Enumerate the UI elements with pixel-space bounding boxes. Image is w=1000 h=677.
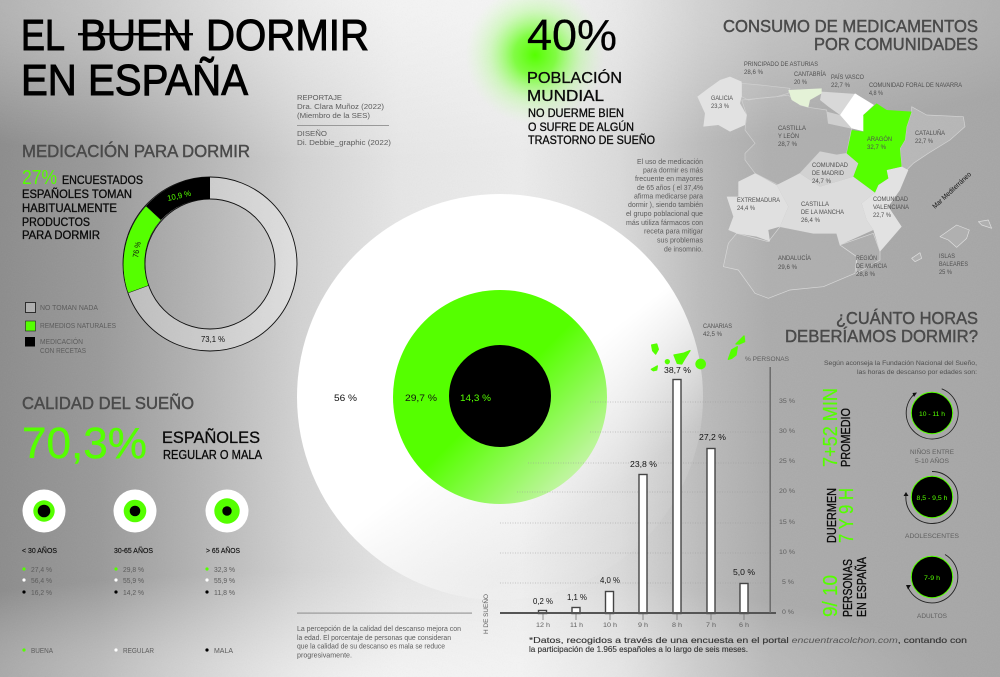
vertical stat: personas: 9/ 10 — [820, 575, 842, 617]
clock: adolescentes — [904, 472, 959, 540]
region: Extremadura — [727, 173, 788, 242]
map labels: CASTILLA — [801, 201, 830, 208]
age group: mayores de 65: 11,8 % — [214, 590, 235, 597]
black pupil: mala 14,3 % — [449, 345, 551, 447]
bar value labels — [533, 366, 755, 606]
green ring: buena 29,7 % — [393, 290, 607, 504]
quality legend: REGULAR — [123, 648, 154, 655]
medication paragraph: El uso de medicación — [637, 159, 703, 166]
bar chart: horas de sueño — [481, 356, 795, 634]
map labels — [711, 61, 973, 278]
stat caption — [162, 428, 263, 462]
title: EL — [21, 11, 65, 60]
segment: medicación con recetas — [146, 177, 210, 220]
bar 11 h — [572, 608, 580, 614]
bar value labels: 27,2 % — [699, 433, 726, 442]
quality legend: MALA — [214, 648, 233, 655]
map labels: DE MURCIA — [856, 263, 888, 270]
age group: 30-65: 14,2 % — [123, 590, 144, 597]
vertical stat: promedio: PROMEDIO — [838, 408, 853, 467]
map labels: ARAGÓN — [867, 134, 892, 143]
map labels: 29,6 % — [778, 264, 797, 271]
region: Valencia — [862, 167, 908, 252]
eye: menores de 30 — [22, 490, 66, 532]
region: Castilla-La Mancha — [777, 173, 875, 245]
region: Baleares — [912, 220, 992, 262]
medication paragraph: frecuente en mayores — [635, 176, 704, 183]
donut chart — [123, 177, 297, 351]
x axis labels: 7 h — [706, 622, 716, 629]
map labels: COMUNIDAD — [873, 196, 908, 203]
map labels: 28,7 % — [778, 141, 797, 148]
credits: Dra. Clara Muñoz (2022) — [297, 104, 384, 111]
map labels: CANTABRÍA — [794, 69, 827, 78]
medication paragraph: receta para mitigar — [644, 228, 704, 236]
map labels: PAÍS VASCO — [831, 72, 864, 81]
age group: 30-65: 55,9 % — [123, 578, 144, 585]
heading — [785, 308, 978, 346]
40% headline stat: TRASTORNO DE SUEÑO — [528, 134, 655, 147]
bar value labels: 23,8 % — [630, 460, 657, 469]
40% headline stat — [527, 11, 655, 147]
40% headline stat: POBLACIÓN — [527, 70, 622, 87]
vertical stat: promedio — [820, 388, 853, 467]
region: Aragón — [847, 103, 912, 193]
x axis labels: 11 h — [570, 622, 583, 629]
70,3% stat: 70,3% — [22, 419, 147, 468]
bar 9 h — [639, 474, 647, 614]
map labels: 28,8 % — [856, 271, 875, 278]
eye: mayores de 65 — [206, 490, 248, 532]
map labels: Y LEÓN — [778, 131, 799, 140]
map labels: 28,6 % — [744, 69, 763, 76]
40% headline stat: O SUFRE DE ALGÚN — [528, 121, 634, 134]
title — [21, 11, 369, 105]
age group: 30-65 — [114, 546, 153, 597]
x axis labels: 9 h — [638, 622, 648, 629]
map labels: EXTREMADURA — [737, 197, 781, 204]
bar 7 h — [707, 448, 715, 614]
region: Madrid — [800, 152, 858, 187]
map labels: 22,7 % — [831, 82, 850, 89]
bar 8 h — [673, 380, 681, 614]
map labels: BALEARES — [939, 261, 968, 268]
Canary Islands: CANARIAS — [703, 323, 733, 330]
stat text — [22, 167, 143, 242]
map labels: ISLAS — [939, 253, 956, 260]
stat text: 27% — [22, 167, 57, 189]
map labels: 4,8 % — [869, 90, 883, 97]
green glow — [465, 0, 605, 125]
intro text: las horas de descanso por edades son: — [857, 369, 977, 376]
heading: consumo de medicamentos: POR COMUNIDADES — [814, 34, 978, 54]
vertical stat: duermen: DUERMEN — [824, 488, 839, 543]
vertical stat: promedio: 7+52 MIN — [820, 388, 842, 467]
title: BUEN — [80, 11, 192, 60]
legend — [25, 302, 116, 355]
map labels: PRINCIPADO DE ASTURIAS — [744, 61, 819, 68]
heading: DEBERÍAMOS DORMIR? — [785, 326, 978, 346]
age group: menores de 30 — [22, 546, 57, 597]
clock: adolescentes: 8,5 - 9,5 h — [916, 495, 948, 502]
region: Andalucía — [723, 227, 857, 298]
age group: menores de 30: 56,4 % — [31, 578, 52, 585]
text block: percepción de la calidad: que la calidad de su descanso es mala se reduce — [297, 644, 445, 650]
age group: mayores de 65: 32,3 % — [214, 567, 235, 574]
medication paragraph: más utiliza fármacos con — [626, 220, 703, 227]
heading: consumo de medicamentos — [723, 16, 978, 54]
map labels: 24,7 % — [812, 178, 831, 185]
eye: 30-65 — [114, 490, 156, 532]
map labels: 24,4 % — [737, 205, 755, 212]
white ring: regular 56 % — [297, 194, 703, 600]
Canary Islands — [651, 323, 745, 371]
y axis labels: 15 % — [779, 519, 795, 526]
stat text: PARA DORMIR — [22, 230, 100, 242]
stat text: HABITUALMENTE — [22, 203, 117, 215]
medication paragraph: afirma medicarse para — [634, 194, 703, 200]
region: País Vasco — [820, 92, 857, 115]
bar 12 h — [538, 610, 546, 614]
donut chart: 73,1 % — [201, 335, 225, 344]
x axis labels: 6 h — [739, 622, 749, 629]
clock: niños: NIÑOS ENTRE — [910, 447, 954, 456]
large eye chart — [297, 194, 703, 600]
quality legend — [22, 648, 233, 655]
stat text: PRODUCTOS — [22, 217, 90, 229]
intro text — [824, 360, 977, 376]
medication paragraph: para dormir es más — [643, 168, 703, 174]
footnote: *Datos, recogidos a través de una encuesta en el portal encuentracolchon.com , contando con — [529, 636, 967, 645]
age group: 30-65: 29,8 % — [123, 567, 144, 574]
map labels: 32,7 % — [867, 144, 886, 151]
stat text: ESPAÑOLES TOMAN — [22, 188, 132, 201]
donut chart: 10,9 % — [166, 189, 192, 203]
x axis labels: 10 h — [603, 622, 617, 629]
heading: consumo de medicamentos: CONSUMO DE MEDICAMENTOS — [723, 16, 978, 36]
Canary Islands: 42,5 % — [703, 331, 722, 338]
text block: percepción de la calidad: progresivamente. — [297, 652, 352, 660]
panel: cuántas horas — [785, 308, 978, 620]
map labels: GALICIA — [711, 95, 733, 102]
vertical stat: duermen: 7 Y 9 H — [836, 488, 858, 543]
y axis labels: 20 % — [779, 488, 795, 495]
x axis labels: 8 h — [672, 622, 682, 629]
medication paragraph: sus problemas — [657, 238, 703, 244]
label 56 %: 56 % — [334, 393, 358, 404]
vertical stat: duermen — [824, 488, 858, 543]
clock: niños: 5-10 AÑOS — [915, 456, 949, 465]
map labels: DE MADRID — [812, 170, 844, 177]
map labels: DE LA MANCHA — [801, 209, 845, 216]
medication paragraph: de insomnio. — [664, 246, 703, 254]
stat caption: ESPAÑOLES — [162, 428, 260, 447]
x axis labels: 12 h — [536, 622, 550, 629]
bar value labels: 0,2 % — [533, 597, 553, 606]
map labels: 20 % — [794, 79, 807, 86]
bar 10 h — [606, 592, 614, 614]
y axis labels: % PERSONAS — [745, 356, 789, 363]
y axis labels: 10 % — [779, 549, 795, 556]
age group: menores de 30: 16,2 % — [31, 590, 52, 597]
clock: niños — [906, 389, 958, 465]
credits: REPORTAJE — [297, 95, 342, 102]
medication paragraph: de 65 años ( el 37,4% — [637, 185, 703, 192]
medication paragraph: dormir ), siendo también — [628, 202, 703, 209]
region: Galicia — [697, 77, 747, 132]
map labels: CASTILLA — [778, 125, 807, 132]
clock: adultos: ADULTOS — [917, 613, 947, 620]
clock: adolescentes: ADOLESCENTES — [905, 533, 959, 540]
credits — [297, 95, 391, 147]
age group: menores de 30: 27,4 % — [31, 567, 52, 574]
map labels: Mar Mediterráneo — [932, 171, 973, 210]
map labels: COMUNIDAD — [812, 162, 848, 169]
x axis labels — [481, 594, 749, 634]
quality legend: BUENA — [31, 648, 53, 655]
age group: 30-65: 30-65 AÑOS — [114, 546, 153, 555]
stat text: ENCUESTADOS — [62, 175, 143, 187]
legend: NO TOMAN NADA — [40, 305, 98, 312]
y axis labels — [745, 356, 795, 616]
clock: adultos — [906, 554, 958, 620]
title: EN ESPAÑA — [21, 55, 249, 105]
clock: adultos: 7-9 h — [924, 575, 940, 582]
panel: medicación para dormir — [22, 140, 297, 355]
legend: CON RECETAS — [40, 348, 86, 355]
map labels: 25 % — [939, 269, 952, 276]
heading: ¿CUÁNTO HORAS — [836, 308, 978, 328]
age group: mayores de 65: > 65 AÑOS — [206, 546, 240, 555]
title: DORMIR — [206, 11, 369, 60]
heading: MEDICACIÓN PARA DORMIR — [22, 140, 250, 161]
bar value labels: 1,1 % — [567, 593, 587, 602]
bar value labels: 4,0 % — [600, 576, 620, 585]
age group: mayores de 65: 55,9 % — [214, 578, 235, 585]
text block: percepción de la calidad: La percepción de la calidad del descanso mejora con — [297, 626, 461, 633]
age group: mayores de 65 — [205, 546, 240, 597]
y axis labels: 0 % — [782, 609, 794, 616]
x axis labels: H DE SUEÑO — [481, 594, 490, 634]
credits: Di. Debbie_graphic (2022) — [297, 140, 391, 147]
clock: niños: 10 - 11 h — [919, 411, 945, 418]
heading: CALIDAD DEL SUEÑO — [22, 392, 194, 413]
label 29,7 %: 29,7 % — [405, 393, 438, 404]
stat caption: REGULAR O MALA — [163, 448, 263, 462]
intro text: Según aconseja la Fundación Nacional del Sueño, — [824, 360, 977, 367]
region: Castilla y León — [742, 95, 852, 185]
footnote — [529, 636, 967, 654]
medication paragraph — [626, 159, 704, 254]
bar value labels: 5,0 % — [733, 568, 755, 577]
map labels: ANDALUCÍA — [778, 253, 812, 262]
y axis labels: 25 % — [779, 458, 795, 465]
region: Cantabria — [788, 88, 822, 107]
map labels: 22,7 % — [873, 212, 891, 219]
y axis labels: 5 % — [782, 579, 794, 586]
credits: DISEÑO — [297, 129, 328, 138]
bar value labels: 38,7 % — [664, 366, 691, 375]
vertical stat: personas — [820, 557, 869, 617]
footnote: la participación de 1.965 españoles a lo largo de seis meses. — [529, 645, 748, 654]
region: La Rioja — [827, 112, 852, 128]
y axis labels: 30 % — [779, 428, 795, 435]
map labels: COMUNIDAD FORAL DE NAVARRA — [869, 82, 963, 89]
panel: calidad del sueño — [22, 392, 263, 655]
legend: MEDICACIÓN — [40, 337, 83, 346]
donut chart: 76 % — [131, 241, 143, 258]
medication paragraph: el grupo poblacional que — [626, 211, 703, 218]
credits: (Miembro de la SES) — [297, 113, 370, 120]
legend: REMEDIOS NATURALES — [40, 323, 116, 330]
region: Murcia — [840, 233, 880, 273]
bar 6 h — [740, 584, 748, 614]
segment: remedios naturales — [123, 206, 161, 293]
40% headline stat: MUNDIAL — [527, 88, 604, 105]
vertical stat: personas: PERSONAS — [840, 559, 855, 617]
text block: percepción de la calidad: la edad. El porcentaje de personas que consideran — [297, 635, 451, 642]
region: Navarra — [840, 93, 874, 132]
label 14,3 %: 14,3 % — [460, 393, 492, 404]
y axis labels: 35 % — [779, 398, 795, 405]
map labels: VALENCIANA — [873, 204, 910, 211]
map labels: 23,3 % — [711, 103, 729, 110]
map labels: 26,4 % — [801, 217, 820, 224]
map labels: REGIÓN — [856, 253, 877, 262]
age group: menores de 30: < 30 AÑOS — [22, 546, 57, 555]
text block: percepción de la calidad — [297, 612, 472, 660]
40% headline stat: 40% — [527, 11, 617, 60]
40% headline stat: NO DUERME BIEN — [528, 108, 624, 120]
region: Cataluña — [900, 107, 965, 170]
region: Asturias — [742, 83, 790, 100]
vertical stat: personas: EN ESPAÑA — [854, 557, 869, 617]
map of Spain — [697, 61, 992, 298]
map labels: 22,7 % — [915, 138, 933, 145]
map labels: CATALUÑA — [915, 128, 946, 137]
